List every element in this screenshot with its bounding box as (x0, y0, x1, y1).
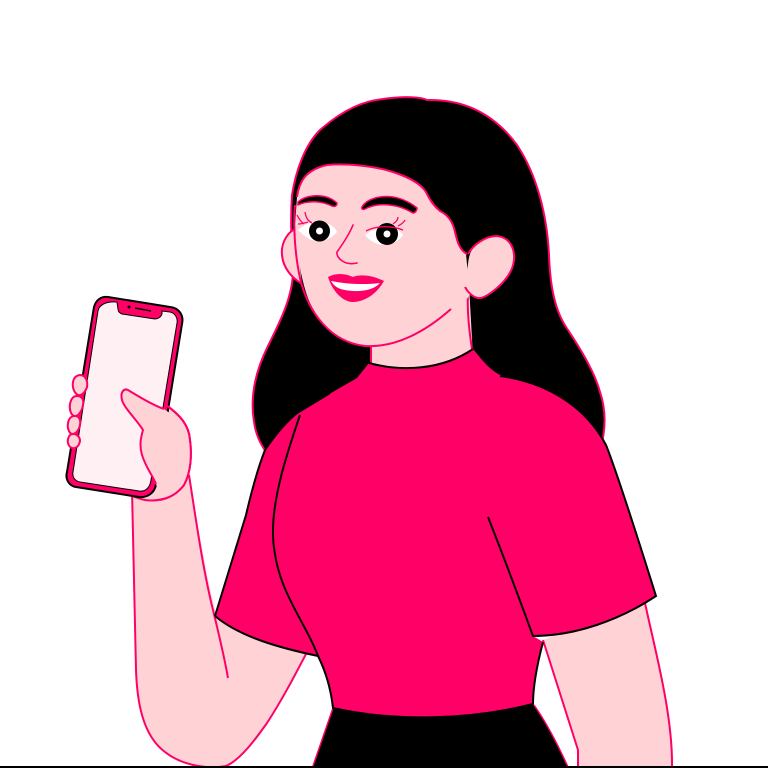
right ear (465, 236, 514, 298)
fingers (68, 375, 87, 448)
mouth (328, 274, 384, 302)
phone (66, 297, 182, 497)
hair (253, 97, 604, 452)
right eye (365, 217, 405, 245)
hand back (132, 405, 191, 500)
phone screen (73, 302, 177, 491)
left eye (297, 212, 337, 242)
face (294, 164, 470, 346)
right arm (543, 600, 672, 768)
right eyebrow (362, 197, 417, 213)
shirt (215, 349, 656, 717)
neck (370, 285, 474, 375)
skirt (312, 704, 568, 768)
left eyebrow (298, 196, 337, 206)
ground line (0, 766, 768, 768)
left ear (282, 229, 302, 284)
nose (337, 225, 357, 264)
phone speaker (128, 306, 151, 311)
left arm (132, 475, 318, 767)
thumb and palm front (121, 389, 191, 500)
